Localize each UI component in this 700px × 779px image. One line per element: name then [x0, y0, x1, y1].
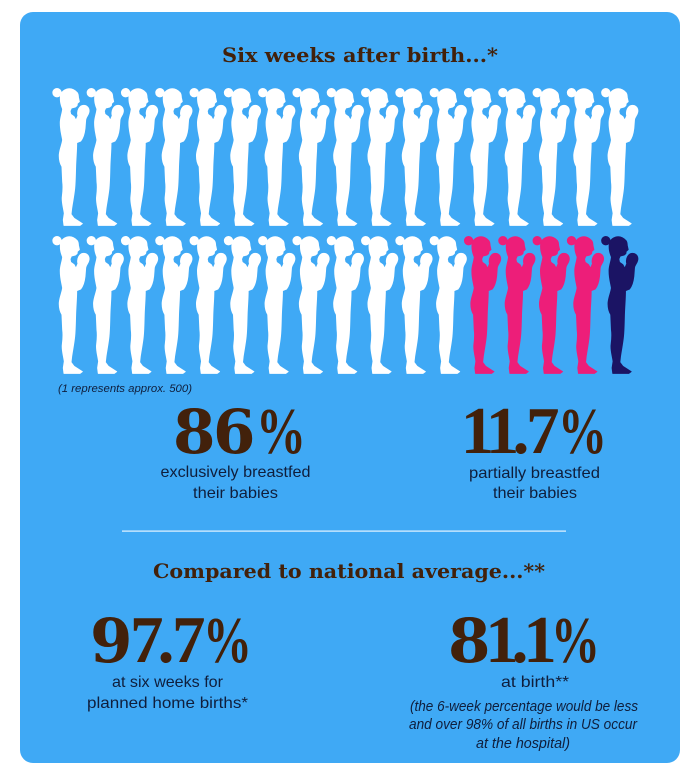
stat: 86 percent exclusively breastfed: [160, 395, 310, 502]
figure row 2: navy mother: [602, 236, 638, 373]
stat: 81.1 percent at birth: (the 6-week percentage would be less: [410, 699, 638, 715]
stat: 86 percent exclusively breastfed: their babies: [193, 485, 278, 502]
stat: 86 percent exclusively breastfed: %: [256, 395, 306, 468]
stat: 11.7 percent partially breastfed: %: [558, 395, 607, 468]
stat: 97.7 percent at six weeks: 7.7: [130, 603, 206, 677]
stat: 81.1 percent at birth: at birth**: [501, 674, 569, 691]
stat: 97.7 percent at six weeks: [87, 603, 252, 712]
stat: 97.7 percent at six weeks: 9: [90, 606, 132, 677]
figure row 1: white mothers: [53, 88, 638, 225]
heading: compared to national average: Compared to national average...**: [153, 559, 546, 583]
stat: 81.1 percent at birth: 8: [448, 606, 490, 677]
scale note: (1 represents approx. 500): [58, 383, 192, 395]
stat: 81.1 percent at birth: %: [551, 604, 600, 677]
stat: 97.7 percent at six weeks: at six weeks for: [112, 674, 224, 691]
title: six weeks after birth: Six weeks after birth...*: [222, 43, 499, 67]
figure row 2: white mothers: [53, 236, 466, 373]
stat: 81.1 percent at birth: at the hospital): [476, 736, 570, 752]
stat: 11.7 percent partially breastfed: partially breastfed: [469, 465, 600, 482]
stat: 86 percent exclusively breastfed: 86: [173, 397, 255, 468]
stat: 81.1 percent at birth: [409, 603, 638, 752]
stat: 97.7 percent at six weeks: planned home births*: [87, 695, 248, 712]
stat: 86 percent exclusively breastfed: exclusively breastfed: [160, 464, 310, 481]
stat: 81.1 percent at birth: and over 98% of all births in US occur: [409, 717, 638, 733]
figure row 2: pink mothers: [464, 236, 604, 373]
stat: 11.7 percent partially breastfed: 11.7: [461, 394, 560, 468]
stat: 97.7 percent at six weeks: %: [203, 604, 252, 677]
stat: 11.7 percent partially breastfed: [461, 394, 607, 502]
stat: 81.1 percent at birth: 1.1: [485, 603, 557, 677]
stat: 11.7 percent partially breastfed: their babies: [493, 485, 577, 502]
